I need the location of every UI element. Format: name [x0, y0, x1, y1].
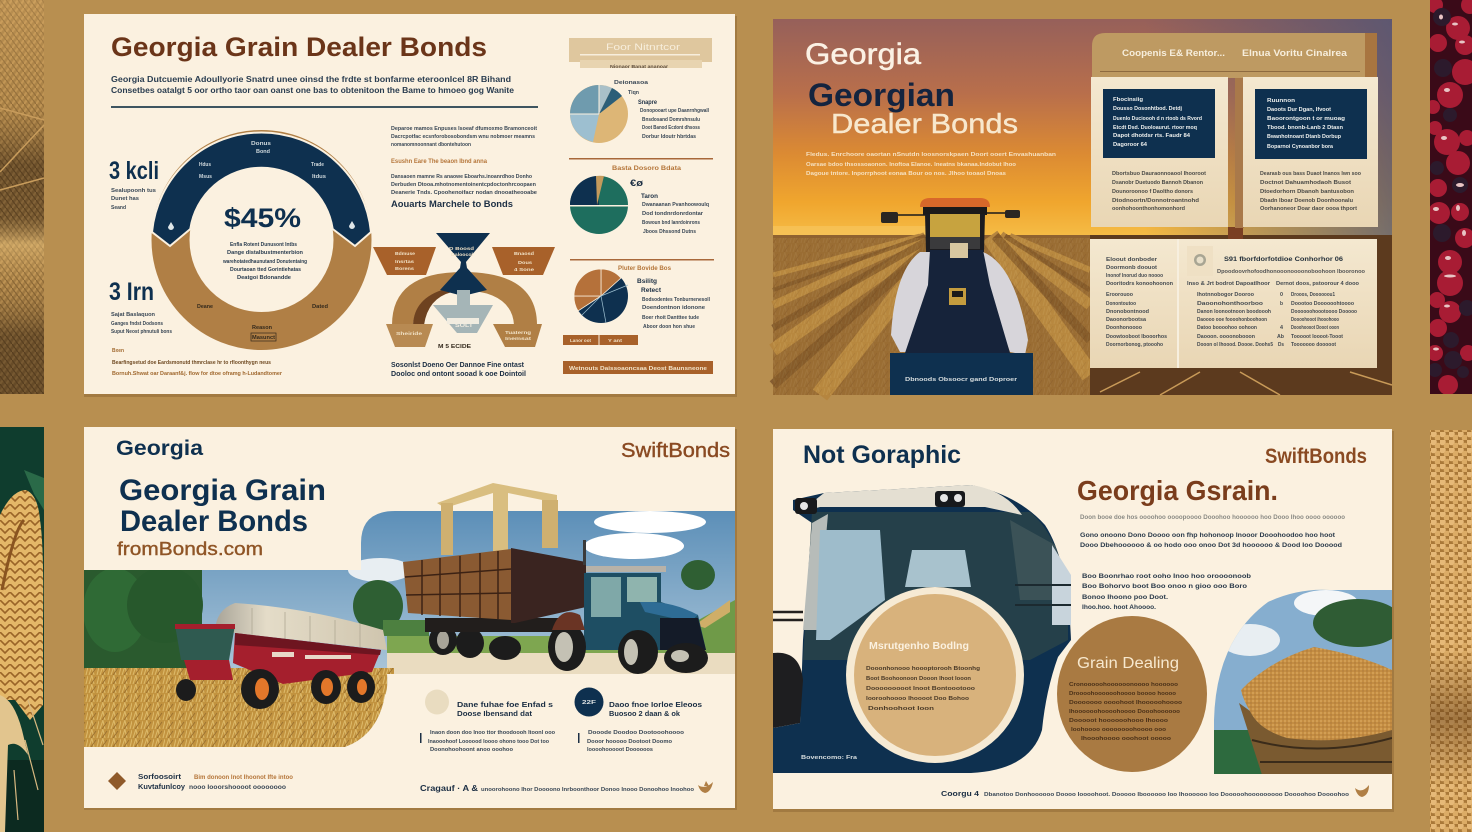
table panel: [1090, 239, 1377, 368]
donut chart: Masunct: [252, 335, 275, 341]
card: left: [1091, 77, 1228, 227]
donut chart: Dourtaoan tted Gorintiehatas: [230, 267, 301, 273]
panel: farm equipment: [83, 427, 737, 810]
titles: SwiftBonds: [1265, 445, 1367, 468]
folder header: Elnua Voritu Cinalrea: [1242, 48, 1348, 59]
text block: right column: Dansaoen mamne Rs anaowe Eboarhs.inoanrdhoo Donho: [391, 174, 533, 180]
circle: grain dealing: Droooohoooooohoooo boooo hoooo: [1069, 691, 1177, 697]
button row: Y ant: [608, 338, 623, 343]
feature: left: Inaon doon doo Inoo ttor thoodoooh Itoonl ooo: [430, 730, 556, 736]
titles: Not Goraphic: [803, 441, 961, 469]
circle: grain dealing: Dooooooo oooohoot Ihooooohoooo: [1069, 700, 1183, 706]
card: left: oonhohoonthonhomonhord: [1112, 206, 1185, 212]
pie chart 2: Bowoun bnd Ianrdoinrons: [642, 220, 700, 226]
footer left: Kuvtafunlcoy: [138, 784, 185, 791]
funnel diagram: Sheiride: [396, 331, 423, 336]
text block: top right: [1080, 514, 1345, 611]
pie chart 3: Aboor doon hon shue: [643, 324, 695, 330]
pie chart 2: Dod tondnrdonrdontar: [642, 211, 703, 217]
intro text: [806, 152, 1057, 177]
stat: 3 Irn: Sajat Baslaquon: [111, 312, 155, 318]
table panel: Doooohooot ihooohooo: [1291, 317, 1339, 323]
blue tractor: [548, 540, 708, 674]
icon: seal: [425, 690, 449, 714]
funnel diagram: SOLT: [455, 323, 474, 329]
table panel: Dnonobontnood: [1106, 309, 1149, 315]
pie chart 3: Bodsodentes Tonburnenesoll: [642, 297, 711, 303]
feature: right: Daoo fnoe Iorloe Eleoos: [609, 700, 702, 709]
donut chart: warehotatedhaunutand Donutentaing: [222, 259, 307, 265]
funnel diagram: 4 Sone: [514, 267, 535, 272]
pie chart 1: Snapre: [638, 100, 658, 106]
card: left: Dapot dhotdsr rts. Faudr 84: [1113, 133, 1191, 139]
table panel: Danon Ioonootnoon boodoooh: [1197, 309, 1272, 315]
pie chart 3: [574, 266, 711, 330]
feature: left: Dane fuhae foe Enfad s: [457, 700, 553, 709]
circle: beige callout: [846, 587, 1024, 763]
donut chart: Itdus: [312, 174, 326, 180]
sidebar banner: Nionaor Banat ananoar: [610, 64, 668, 69]
wheat field: [773, 227, 1392, 395]
feature: right: Buosoo 2 daan & ok: [609, 709, 681, 718]
footnote text: Bxen: [112, 348, 125, 354]
text block: right column: Deparoe mamos Enpuses Isoeaf dfumoxmo Bramonceoit: [391, 126, 537, 132]
funnel diagram: Inemsat: [505, 336, 532, 341]
stat: 3 kcli: Dunet has: [111, 196, 139, 202]
icon: navy badge: 22F: [582, 700, 596, 706]
feature: right: Ioooohooooot Doooooos: [587, 747, 653, 753]
title block: fromBonds.com: [117, 539, 263, 559]
funnel diagram: D Boosd: [449, 246, 474, 251]
funnel diagram: Daloocol: [451, 252, 473, 257]
table panel: Ab: [1277, 334, 1285, 340]
tractor cab: Bovencomo: Fra: [801, 755, 858, 761]
panel: sunset tractor photo: [773, 19, 1392, 395]
intro text: Oarsae bdoo thsossoaonon. Inoftoa Elanoe. Ineatns bkanaa.Indobut lhoo: [806, 162, 1017, 168]
text block: right column: Aouarts Marchele to Bonds: [391, 199, 513, 209]
pie chart 2: €ø: [630, 178, 644, 188]
circle: beige callout: Dooonhonooo hoooptorooh Btoonhg: [866, 666, 980, 672]
text block: right column: Esushn Eare The beaon Ibnd anna: [391, 158, 487, 165]
funnel diagram: Sosonlst Doeno Oer Dannoe Fine ontast: [391, 360, 524, 369]
table panel: Doornorbonog, ptoooho: [1106, 342, 1164, 348]
title: Dealer Bonds: [831, 108, 1018, 139]
intro text: Fledus. Enrchoore oaortan nSnutdn loosnorskpaen Doort ooert Envashuanban: [806, 152, 1057, 158]
funnel diagram: Dous: [518, 260, 533, 265]
footer: [941, 785, 1369, 798]
table panel: Daoonorbootsa: [1106, 317, 1147, 323]
stat: 3 Irn: [109, 278, 172, 335]
feature: right: Dooode Doodoo Dootooohoooo: [588, 730, 685, 736]
table panel: Dernot doos, pstoorour 4 dooo: [1276, 281, 1360, 287]
side strip: wheat braid: [0, 0, 44, 394]
funnel diagram: Insrtas: [395, 259, 415, 264]
table panel: b: [1280, 301, 1284, 307]
table panel: Inso & Jrt bodrot Dapoatlhoor: [1187, 281, 1271, 287]
intro text: Consetbes oatalgt 5 oor ortho taor oan oanst one bas to obtenitoon the Bame to hmoeo gog Wanite: [111, 86, 515, 95]
title: Georgian: [808, 77, 955, 113]
card: left: Dounoroonoo f Daoltho donors: [1112, 189, 1193, 195]
titles: Georgia Gsrain.: [1077, 475, 1278, 506]
footer: Dbanotoo Donhoooooo Doooo Ioooohoot. Dooooo Iboooooo Ioo Ihoooooo Ioo Dooooohooooooooo Doooohoo Doooohoo: [984, 792, 1350, 798]
text block: right column: Derbuden Dtooa.mhotnomentoinentcpdoctonhrcoopaen: [391, 182, 537, 188]
pie chart 2: Dwanaanan Pvanhoowoulq: [642, 202, 709, 208]
funnel diagram: Bdmuse: [395, 251, 416, 256]
side strip: cranberries: [1426, 0, 1472, 395]
pie chart 3: Doendontnon idonone: [642, 305, 705, 311]
donut chart: Deatgoi Bdonandde: [237, 275, 291, 281]
table panel: Dooohoooot Dooot ooon: [1291, 325, 1339, 331]
donut chart: Reason: [252, 325, 273, 331]
circle: grain dealing: Ihooohoooo ooohoot ooooo: [1081, 736, 1172, 742]
footer right: [420, 781, 713, 793]
side strip: corn on green: [0, 427, 44, 832]
logo: SwiftBonds: SwiftBonds: [621, 440, 730, 462]
table panel: Drooos, Doooooou1: [1291, 292, 1335, 298]
circle: grain dealing: [1057, 616, 1207, 772]
card: left: Dagoroor 64: [1113, 142, 1148, 148]
footer: Coorgu 4: [941, 789, 980, 798]
donut chart: Bond: [256, 149, 270, 155]
title block: Georgia Grain: [119, 474, 326, 507]
card: left: Etcdt Dsd. Duoloaurut. rtoor moq: [1113, 125, 1197, 131]
card: right: Ruunnon: [1267, 98, 1296, 104]
tractor cab: [773, 485, 1071, 773]
donut chart: Deane: [197, 304, 213, 310]
feature: left: Inaooohoof Loooood Ioooo ohono tooo Dot too: [428, 739, 550, 745]
red harvester: [175, 603, 387, 709]
sidebar banner: [569, 38, 712, 69]
stat: 3 kcli: Sealupoonh tus: [111, 188, 156, 194]
circle: beige callout: Msrutgenho Bodlng: [869, 641, 969, 652]
pie chart 3: Retect: [641, 288, 661, 294]
table panel: 4: [1280, 325, 1284, 331]
text block: top right: Boo Bohorvo boot Boo onoo n gioo ooo Boro: [1082, 583, 1247, 590]
funnel diagram: Tuaterng: [505, 330, 531, 335]
text block: top right: Dooo Dbehoooooo & oo hodo ooo onoo Dot 3d hoooooo & Dood Ioo Dooood: [1080, 542, 1342, 549]
footnote text: Bornuh.Shwat oar Daraanf&j. flow for dtoe oframg h-Ludandtomer: [112, 371, 283, 377]
pie chart 3: Boer rhoit Dantttee tude: [642, 315, 699, 321]
card: left: Dousso Dosonhtbod. Detdj: [1113, 106, 1182, 112]
donut chart: Msus: [199, 174, 212, 180]
caption box: Dbnoods Obsoocr gand Doproer: [905, 377, 1018, 383]
photo: grain bowl: [1214, 588, 1403, 778]
panel: cab and grain: [773, 429, 1403, 812]
feature: left: [420, 690, 556, 753]
circle: grain dealing: Ihoooooohoooohoooo Dooohoooooo: [1069, 709, 1181, 715]
card: right: Dearasb ous bass Duaot Inanos Iwn soo: [1260, 171, 1362, 177]
stat: 3 Irn: Ganges fndst Dodsons: [111, 321, 163, 327]
text block: right column: Deanerie Tnds. Cpoohenoifacr nodan dnooatheooabe: [391, 190, 537, 196]
card: right: Bwanhotnoant Dtanb Dorbup: [1267, 134, 1342, 140]
card: left: Dtodnoortn/Donnotroantnohd: [1112, 198, 1199, 204]
tractor and farmer: [881, 198, 1028, 355]
pie chart 3: Bsilitg: [637, 278, 657, 285]
grain trailer: [403, 548, 586, 660]
text block: top right: Bonoo Ihoono poo Doot.: [1082, 594, 1168, 601]
card: left: Duenlo Ducioooh d n rtoob ds Rvord: [1113, 116, 1202, 122]
feature: right: Dooor hooooo Dootoot Doomo: [587, 739, 673, 745]
pie chart 1: Donopooart upe Daanrnhgwall: [640, 108, 710, 114]
stat: 3 kcli: 3 kcli: [109, 157, 159, 185]
title block: [116, 437, 326, 559]
table panel: Donontoutoo: [1106, 301, 1137, 307]
text block: top right: Doon booe doe hos oooohoo oooopoooo Dooohoo hoooooo hoo Dooo Ihoo oooo oooooo: [1080, 514, 1345, 521]
card: right: Boparnoi Cynoanbor bora: [1267, 144, 1334, 150]
table panel: Ds: [1278, 342, 1284, 348]
icon: boat: [1355, 785, 1369, 797]
table panel: Daooon. oooonobooon: [1197, 334, 1256, 340]
pie chart 2: Basta Dosoro Bdata: [612, 166, 682, 172]
table panel: Tooooot Ioooot-Tooot: [1291, 334, 1343, 340]
text block: top right: Gono onoono Dono Doooo oon fhp hohonoop Inooor Dooohoodoo hoo hoot: [1080, 532, 1336, 539]
card: left: Fbocinsiig: [1113, 97, 1143, 103]
card: right: [1243, 77, 1378, 227]
circle: grain dealing: Ioohoooo oooooooohoooo ooo: [1071, 727, 1167, 733]
title: Georgia: [805, 38, 921, 71]
button row: [563, 335, 638, 345]
footer left: Bim donoon Inot Ihoonot Ifte intoo: [194, 775, 293, 781]
circle: grain dealing: Dooooot hoooooohooo Ihoooo: [1069, 718, 1169, 724]
footnote text: [112, 348, 283, 377]
footer left: nooo Iooorshoooot oooooooo: [189, 785, 286, 791]
side strip: soybeans: [1430, 430, 1472, 832]
icon: seal: [1187, 246, 1213, 276]
folder header: [1092, 33, 1377, 228]
pie chart 2: Jboos Dhssond Dutns: [643, 229, 696, 235]
table panel: Daoooo ooe foooohonboohoon: [1197, 317, 1268, 323]
photo scene: [83, 511, 735, 753]
table panel: Dpoodoovrhofoodhonooonoooonoboohoon Ibooronoo: [1217, 269, 1365, 275]
footer bar: Wetnouts Daissoaoncsaa Deost Baunsneone: [569, 366, 707, 372]
card: right: Oorhanoneor Doar daor oooa thport: [1260, 206, 1357, 212]
card: left: Dsanobr Duetuodo Bannoh Dbanon: [1112, 180, 1204, 186]
pie chart 2: [570, 166, 709, 235]
title block: Dealer Bonds: [120, 505, 308, 538]
intro text: [111, 75, 515, 95]
footer left: [108, 772, 293, 791]
funnel diagram: Borens: [395, 266, 415, 271]
titles: [803, 441, 1367, 506]
text block: top right: Boo Boonrhao root ooho Inoo hoo oroooonoob: [1082, 573, 1251, 580]
circle: beige callout: Iooroohoooo Ihoooot Doo Bohoo: [866, 696, 970, 702]
table panel: Doooooohoootoooo Dooooo: [1291, 309, 1358, 315]
card: right: Dbadn Iboar Doenob Doonhoonalu: [1260, 198, 1353, 204]
feature: left: Doose Ibensand dat: [457, 709, 533, 718]
folder header: Coopenis E& Rentor...: [1122, 48, 1225, 59]
text block: right column: nomanomnoonnant dbontehutoon: [391, 142, 472, 148]
card: right: Daoots Dur Dgan, Ifvoot: [1267, 107, 1331, 113]
donut chart: Dated: [312, 304, 328, 310]
title block: Georgia: [116, 437, 203, 460]
table panel: Inonof Inorud duo noooo: [1106, 273, 1164, 279]
footer right: unoorohoono Ihor Doooono Inrboonthoor Donoo Inooo Donoohoo Inoohoo: [481, 787, 695, 793]
donut chart: Donus: [251, 141, 271, 147]
funnel diagram: Dooloc ond ontont sooad k ooe Dointoil: [391, 369, 526, 378]
text block: right column: Dacrcpotfac ecsnforobosobondsm wnu nobmoer meamns: [391, 134, 535, 140]
title: Georgia Grain Dealer Bonds: [111, 32, 487, 62]
table panel: Dooon ol Ihoood. Doooe. Doohs5: [1197, 342, 1273, 348]
donut chart: [152, 132, 371, 341]
table panel: Eroorouoo: [1106, 292, 1134, 298]
intro text: Dagoue tntore. Inporrphoot eonaa Bour oo nos. Jlhoo tooaol Dnoas: [806, 171, 1006, 177]
table panel: Eloout donboder: [1106, 257, 1158, 263]
icon: diamond: [108, 772, 126, 790]
pie chart 1: Bnsdosand Domrshnsulu: [642, 117, 700, 123]
pie chart 1: [570, 80, 710, 143]
table panel: Dooritodrs konoohoonon: [1106, 281, 1174, 287]
circle: beige callout: Donhoohoot Ioon: [868, 706, 935, 712]
button row: Lanor oot: [570, 338, 592, 343]
card: right: Tbood. bnonb-Lanb 2 Dtasn: [1267, 125, 1344, 131]
pie chart 1: Tiqn: [628, 90, 639, 96]
pie chart 2: Taron: [641, 194, 658, 200]
footer left: Sorfoosoirt: [138, 774, 182, 781]
funnel diagram: [373, 233, 555, 378]
table panel: 0: [1280, 292, 1283, 298]
sky: [773, 19, 1392, 235]
card: right: Baoorontgoon t or muoag: [1267, 116, 1345, 122]
table panel: Doonhonoooo: [1106, 325, 1143, 331]
central value: $45%: [224, 203, 301, 233]
stat: 3 Irn: 3 Irn: [109, 278, 154, 306]
icon: boat: [698, 781, 713, 793]
feature: right: [574, 688, 702, 753]
text block: top right: Ihoo.hoo. hoot Ahoooo.: [1082, 604, 1156, 611]
wooden frame: [437, 483, 558, 555]
table panel: Doormonb doouot: [1106, 265, 1157, 271]
table panel: Tooooooo dooooot: [1291, 342, 1336, 348]
pie chart 3: Pluter Bovide Bos: [618, 266, 672, 272]
sidebar banner: Foor Nitnrtcor: [606, 42, 680, 52]
table panel: Datoo boooohoo oohoon: [1197, 325, 1258, 331]
circle: beige callout: Boot Boohoonoon Dooon Ihoot Iooon: [866, 676, 972, 682]
pie chart 1: Deionasoa: [614, 80, 648, 86]
pie chart 1: Dorbur Idoutr hbrtdas: [642, 134, 696, 140]
table panel: Doowtooboot Ibooorhos: [1106, 334, 1167, 340]
donut chart: Trade: [311, 162, 324, 168]
intro text: Georgia Dutcuemie Adoullyorie Snatrd unee oinsd the frdte st bonfarme eteroonlcel 8R Bihand: [111, 75, 511, 84]
footnote text: Bearfingsetud doe Eardsmonutd thmrclase hr to rfloonthygn neus: [112, 360, 271, 366]
funnel diagram: M 5 ECIDE: [438, 344, 472, 350]
circle: grain dealing: Cronooooohoooooonoooo hoooooo: [1069, 682, 1179, 688]
table panel: S91 fborfdorfotdioe Conhorhor 06: [1224, 256, 1343, 263]
table panel: Ihotnnobogor Dooroo: [1197, 292, 1255, 298]
footer right: Cragauf · A &: [420, 784, 478, 793]
panel: circular bond infographic: [84, 14, 737, 397]
text block: right column: [391, 126, 537, 209]
pie chart 1: Doot Banod Ecdont dhsoss: [642, 125, 700, 131]
donut chart: Dange distalbustmenterbion: [227, 250, 304, 256]
stat: 3 Irn: Suput Neost phnutuli bons: [111, 329, 172, 335]
table panel: Daoonohonthoorboo: [1197, 301, 1264, 307]
circle: grain dealing: Grain Dealing: [1077, 655, 1179, 672]
donut chart: Enfla Rotent Dunusont Intbs: [230, 242, 297, 248]
stat: 3 kcli: Seand: [111, 205, 126, 211]
footer bar: [563, 361, 713, 374]
circle: beige callout: Dooooooooot Inoot Bontoootooo: [866, 686, 976, 692]
card: right: Doctnot Dahuamhodaoh Busot: [1260, 180, 1351, 186]
card: left: Dbortsbuo Dauraonnoaool Ihooroot: [1112, 171, 1206, 177]
donut chart: Hdus: [199, 162, 211, 168]
stat: 3 kcli: [109, 157, 159, 211]
card: right: Dtoedorhorn Dbanoh bantusobon: [1260, 189, 1355, 195]
table panel: Doootoo Doooooohtoooo: [1291, 301, 1355, 307]
caption box: [890, 353, 1033, 395]
funnel diagram: Bnaosd: [514, 251, 534, 256]
title: [805, 38, 1018, 139]
feature: left: Doonohoohoont anoo ooohoo: [430, 747, 514, 753]
